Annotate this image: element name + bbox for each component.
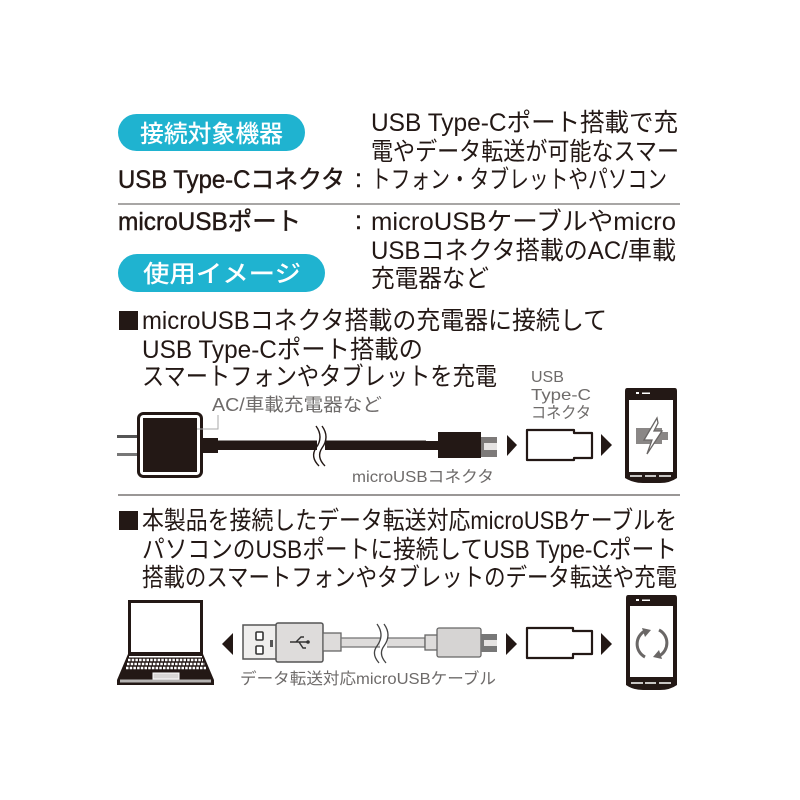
label: USB Type-C connector: USB Type-Cコネクタ xyxy=(118,166,345,194)
heading: 使用イメージ: 使用イメージ xyxy=(143,261,301,288)
label: USB Type-C connector: コネクタ xyxy=(531,404,591,422)
arrow: to smartphone xyxy=(601,633,612,655)
text block: data transfer scenario: パソコンのUSBポートに接続してUSB Type-Cポート xyxy=(142,536,677,564)
label: microUSB port: microUSBポート xyxy=(118,208,301,236)
text block: USB Type-C connector description: トフォン・タブレットやパソコン xyxy=(371,166,667,194)
arrow: to Type-C connector xyxy=(506,633,517,655)
text block: microUSB port description: 充電器など xyxy=(371,265,489,293)
text block: microUSB port description xyxy=(371,208,676,293)
text block: USB Type-C connector description: 電やデータ転送が可能なスマー xyxy=(371,138,679,166)
label: microUSB connector: microUSBコネクタ xyxy=(352,468,494,486)
heading: 使用イメージ xyxy=(118,254,325,292)
arrow: to Type-C connector xyxy=(507,435,517,456)
colon: USB Type-C connector: : xyxy=(355,165,362,193)
label: USB Type-C connector xyxy=(531,369,591,422)
text block: data transfer scenario: 搭載のスマートフォンやタブレットのデータ転送や充電 xyxy=(142,564,677,592)
cable: USB A to microUSB xyxy=(243,623,497,663)
label: data cable: データ転送対応microUSBケーブル xyxy=(240,669,496,688)
text block: USB Type-C connector description: USB Type-Cポート搭載で充 xyxy=(371,109,678,137)
arrow: to smartphone xyxy=(601,434,612,456)
icon: AC charger xyxy=(117,414,218,476)
heading: 接続対象機器: 接続対象機器 xyxy=(140,121,283,148)
heading: 接続対象機器 xyxy=(118,114,305,151)
text block: data transfer scenario: 本製品を接続したデータ転送対応microUSBケーブルを xyxy=(142,507,677,535)
charger cable xyxy=(218,426,426,466)
icon: smartphone charging xyxy=(625,388,677,483)
text block: microUSB port description: microUSBケーブルやmicro xyxy=(371,208,676,236)
label: USB Type-C connector: Type-C xyxy=(531,387,591,404)
text block: charging scenario xyxy=(119,307,607,391)
icon: USB Type-C connector xyxy=(527,430,592,460)
text block: USB Type-C connector description xyxy=(371,109,679,194)
icon: smartphone syncing xyxy=(626,595,677,690)
arrow: to laptop xyxy=(222,633,233,655)
text block: charging scenario: USB Type-Cポート搭載の xyxy=(142,336,423,364)
text block: charging scenario: microUSBコネクタ搭載の充電器に接続して xyxy=(142,307,607,335)
callout: AC charger label xyxy=(197,395,382,429)
colon: microUSB port: : xyxy=(355,207,362,235)
text block: data transfer scenario xyxy=(119,507,677,592)
icon: laptop xyxy=(117,602,214,685)
text block: microUSB port description: USBコネクタ搭載のAC/車載 xyxy=(371,237,676,265)
label: USB Type-C connector: USB xyxy=(531,369,564,386)
icon: USB Type-C connector xyxy=(527,628,592,658)
callout: AC charger label: AC/車載充電器など xyxy=(212,395,382,415)
icon: microUSB connector xyxy=(424,432,497,458)
text block: charging scenario: スマートフォンやタブレットを充電 xyxy=(142,363,497,391)
